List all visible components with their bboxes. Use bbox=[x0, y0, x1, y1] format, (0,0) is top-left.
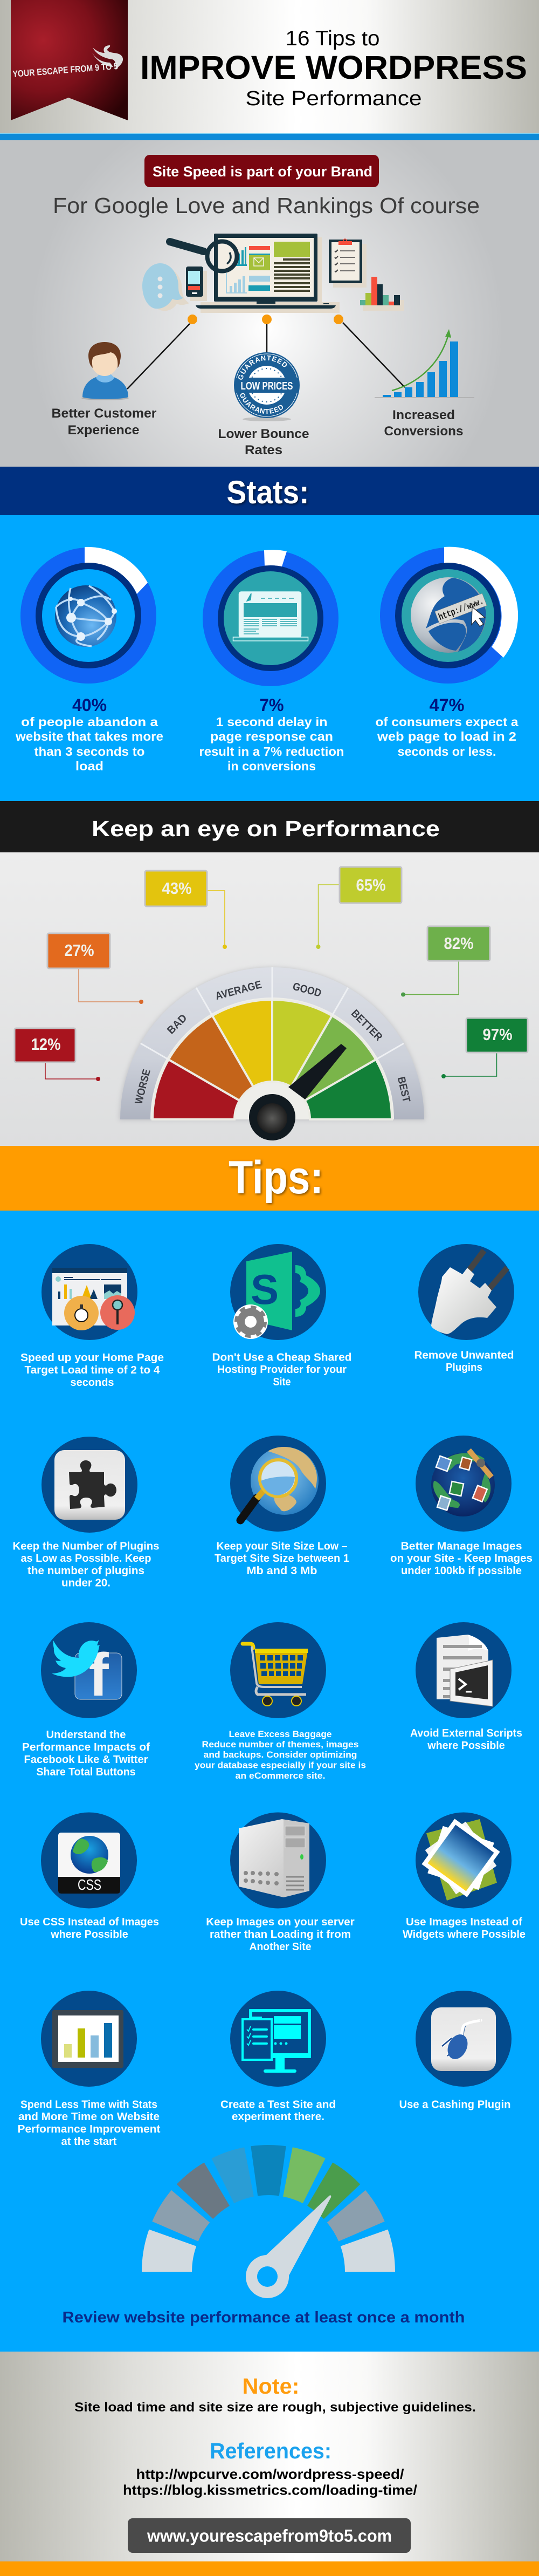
stat: 7% bbox=[199, 550, 344, 773]
icon: facebook: f bbox=[88, 1641, 109, 1709]
speedometer graphic bbox=[142, 2145, 395, 2298]
tip text: Share Total Buttons bbox=[37, 1766, 136, 1778]
tip text bbox=[20, 1352, 164, 1389]
icon: server bbox=[239, 1819, 309, 1897]
icon: analytics page bbox=[52, 1268, 135, 1330]
tip text: Facebook Like & Twitter bbox=[24, 1754, 148, 1766]
stat: 47% bbox=[375, 547, 519, 759]
stat text: in conversions bbox=[227, 759, 316, 773]
tip 8: excess baggage bbox=[195, 1622, 366, 1781]
tip 9: external scripts bbox=[410, 1622, 522, 1752]
stat text: of consumers expect a bbox=[375, 715, 519, 729]
tip text: Avoid External Scripts bbox=[410, 1727, 522, 1739]
icon: web globe bbox=[411, 577, 487, 653]
icon: script document bbox=[437, 1635, 493, 1706]
tip 5: site size bbox=[215, 1436, 349, 1577]
gauge labels: GOOD bbox=[292, 981, 322, 1000]
tip text: Remove Unwanted bbox=[414, 1350, 514, 1362]
tip text: your database especially if your site is bbox=[195, 1760, 366, 1771]
title bbox=[140, 27, 527, 110]
gauge labels: BAD bbox=[165, 1012, 189, 1036]
icon: guarantee seal: LOW PRICES bbox=[240, 380, 293, 392]
tip text: Use CSS Instead of Images bbox=[20, 1916, 159, 1928]
tip text bbox=[13, 1541, 160, 1589]
stat text: website that takes more bbox=[15, 729, 163, 743]
callout: 27%: 27% bbox=[65, 941, 94, 960]
stat text: than 3 seconds to bbox=[34, 744, 144, 759]
tip text: Performance Impacts of bbox=[22, 1741, 150, 1753]
gauge labels: BEST bbox=[395, 1076, 412, 1104]
website pill bbox=[128, 2518, 411, 2553]
brand pill: Site Speed is part of your Brand bbox=[153, 163, 372, 180]
heading bar: tips: Tips: bbox=[229, 1152, 323, 1204]
caption: better customer experience: Experience bbox=[68, 423, 139, 438]
tip 2: cheap shared hosting bbox=[212, 1244, 351, 1388]
tip text bbox=[206, 1916, 355, 1953]
gauge needle bbox=[249, 1044, 347, 1140]
gauge labels: AVERAGE bbox=[214, 979, 263, 1002]
icon: twitter bird bbox=[52, 1639, 100, 1677]
caption: lower bounce rates: Rates bbox=[245, 443, 282, 457]
tip text: Site bbox=[273, 1376, 291, 1388]
callout: 82%: 82% bbox=[444, 934, 473, 953]
review note: Review website performance at least once a month bbox=[63, 2309, 465, 2326]
stat text: web page to load in 2 bbox=[377, 729, 516, 743]
callout: 82% bbox=[401, 926, 490, 997]
tip text: Spend Less Time with Stats bbox=[20, 2099, 157, 2110]
tip text: at the start bbox=[61, 2136, 117, 2148]
tip 13: less time with stats bbox=[17, 1991, 161, 2148]
tip text: Performance Improvement bbox=[17, 2123, 161, 2135]
url bar: http://www. bbox=[437, 597, 485, 623]
tip text: Use Images Instead of bbox=[406, 1916, 522, 1928]
tip text: where Possible bbox=[427, 1740, 505, 1752]
connector lines bbox=[127, 315, 405, 389]
tip text: the number of plugins bbox=[27, 1565, 144, 1577]
stat text: page response can bbox=[210, 729, 333, 743]
icon: sharepoint: S bbox=[251, 1266, 279, 1313]
heading bar: keep an eye on performance bbox=[0, 801, 539, 852]
icon: shopping cart bbox=[243, 1644, 308, 1706]
panel: stats bbox=[0, 515, 539, 801]
stat text: 47% bbox=[429, 695, 465, 715]
brand pill bbox=[144, 155, 379, 187]
tip text: Mb and 3 Mb bbox=[247, 1565, 317, 1577]
tip 3: remove plugins bbox=[414, 1244, 514, 1374]
laptop shadow bbox=[201, 237, 340, 313]
caption: lower bounce rates: Lower Bounce bbox=[218, 427, 309, 441]
logo text: YOUR ESCAPE FROM 9 TO 5 bbox=[12, 61, 119, 79]
tip text bbox=[20, 1916, 159, 1940]
icon: facebook bbox=[75, 1641, 122, 1709]
panel: site speed brand bbox=[0, 140, 539, 467]
caption: increased conversions: Increased bbox=[392, 408, 455, 422]
heading bar: keep an eye on performance: Keep an eye on Performance bbox=[92, 816, 440, 841]
heading bar: stats: Stats: bbox=[226, 474, 309, 510]
tip text: Keep Images on your server bbox=[206, 1916, 355, 1928]
tip 4: number of plugins bbox=[13, 1437, 160, 1589]
icon: sharepoint bbox=[233, 1252, 320, 1339]
tip text: on your Site - Keep Images bbox=[390, 1553, 533, 1564]
icon: earth with photos bbox=[431, 1450, 495, 1516]
callout: 12% bbox=[15, 1028, 100, 1081]
tip 6: manage images bbox=[390, 1436, 533, 1577]
note heading: Note: bbox=[243, 2374, 300, 2399]
tip text: Leave Excess Baggage bbox=[229, 1729, 332, 1739]
stat: 40% bbox=[15, 547, 163, 773]
bottom orange bar bbox=[0, 2561, 539, 2576]
title: IMPROVE WORDPRESS bbox=[140, 49, 527, 86]
tip text bbox=[215, 1541, 349, 1577]
callout: 65%: 65% bbox=[356, 876, 386, 894]
stat text: 1 second delay in bbox=[216, 715, 328, 729]
laptop bbox=[196, 234, 336, 309]
tip text: Keep your Site Size Low – bbox=[217, 1541, 347, 1553]
icon: css file bbox=[58, 1833, 120, 1894]
stat text: result in a 7% reduction bbox=[199, 744, 344, 759]
magnifier bbox=[170, 242, 237, 271]
gauge segments bbox=[153, 1000, 392, 1119]
tip text: Hosting Provider for your bbox=[217, 1364, 347, 1376]
note text: Site load time and site size are rough, subjective guidelines. bbox=[74, 2400, 476, 2415]
tip 7: facebook and twitter bbox=[22, 1622, 150, 1778]
caption: better customer experience: Better Customer bbox=[52, 406, 156, 421]
tip text: rather than Loading it from bbox=[210, 1929, 351, 1940]
stat text: 40% bbox=[72, 695, 107, 715]
website pill: www.yourescapefrom9to5.com bbox=[147, 2526, 392, 2545]
tip text: under 100kb if possible bbox=[401, 1565, 522, 1577]
tip text bbox=[212, 1352, 351, 1388]
tip text: Another Site bbox=[249, 1941, 312, 1953]
stat text: of people abandon a bbox=[21, 715, 158, 729]
title: 16 Tips to bbox=[286, 27, 379, 50]
heading bar: tips bbox=[0, 1146, 539, 1211]
tip text: Reduce number of themes, images bbox=[202, 1739, 359, 1750]
phone bbox=[186, 267, 207, 301]
tip text: under 20. bbox=[61, 1577, 110, 1589]
tip text bbox=[410, 1727, 522, 1752]
tip text: Target Site Size between 1 bbox=[215, 1553, 349, 1564]
caption: better customer experience bbox=[52, 406, 156, 438]
tip text bbox=[17, 2099, 161, 2148]
tip text: Create a Test Site and bbox=[220, 2099, 336, 2110]
tip text: Target Load time of 2 to 4 bbox=[25, 1364, 160, 1376]
title: Site Performance bbox=[246, 87, 421, 110]
icon: puzzle tile bbox=[54, 1450, 125, 1520]
tip text: Widgets where Possible bbox=[403, 1929, 526, 1940]
tip text: Use a Cashing Plugin bbox=[399, 2099, 511, 2110]
tip text: Don't Use a Cheap Shared bbox=[212, 1352, 351, 1364]
icon: rising conversions chart bbox=[375, 329, 474, 398]
callout: 43%: 43% bbox=[162, 879, 192, 898]
tip text: Plugins bbox=[446, 1362, 482, 1374]
tip text: Better Manage Images bbox=[401, 1541, 522, 1553]
caption: lower bounce rates bbox=[218, 427, 309, 457]
illustration: laptop with analytics bbox=[142, 234, 404, 313]
tip text: an eCommerce site. bbox=[235, 1771, 326, 1781]
tip text bbox=[195, 1729, 366, 1781]
caption: increased conversions: Conversions bbox=[384, 424, 464, 439]
panel: footer notes bbox=[0, 2352, 539, 2561]
tip 14: test site bbox=[220, 1991, 336, 2123]
tip text: where Possible bbox=[50, 1929, 128, 1940]
stat text bbox=[15, 695, 163, 773]
clipboard bbox=[330, 239, 367, 288]
tip text: Speed up your Home Page bbox=[20, 1352, 164, 1364]
header panel bbox=[0, 0, 539, 133]
tip text: Keep the Number of Plugins bbox=[13, 1541, 160, 1553]
callout: 97% bbox=[441, 1018, 528, 1078]
reference links bbox=[123, 2466, 417, 2498]
tip 15: caching plugin bbox=[399, 1991, 512, 2110]
panel: performance gauge bbox=[0, 852, 539, 1146]
subheading: For Google Love and Rankings Of course bbox=[53, 193, 480, 218]
logo ribbon bbox=[11, 0, 128, 120]
stat text: seconds or less. bbox=[398, 744, 496, 759]
references heading: References: bbox=[210, 2438, 331, 2463]
tip 11: images on server bbox=[206, 1813, 355, 1953]
reference links: https://blog.kissmetrics.com/loading-time/ bbox=[123, 2482, 417, 2498]
gauge labels bbox=[133, 979, 412, 1105]
heading bar: stats bbox=[0, 467, 539, 515]
callout: 97%: 97% bbox=[483, 1025, 512, 1044]
icon: globe and magnifier bbox=[240, 1447, 319, 1520]
icon: guarantee seal bbox=[234, 352, 300, 421]
gauge labels: BETTER bbox=[349, 1008, 385, 1043]
tip text: Understand the bbox=[46, 1729, 126, 1741]
tip text: and backups. Consider optimizing bbox=[204, 1750, 357, 1760]
gauge bbox=[119, 967, 425, 1140]
icon: network globe bbox=[55, 585, 117, 647]
tip 10: css instead of images bbox=[20, 1813, 159, 1940]
stat text bbox=[375, 695, 519, 759]
mini bar chart bbox=[360, 277, 404, 311]
callout: 27% bbox=[47, 933, 143, 1004]
icon: laptop page bbox=[233, 592, 308, 641]
icon: plug bbox=[431, 1251, 507, 1334]
icon: css file: CSS bbox=[78, 1876, 101, 1893]
icon: guarantee seal: GUARANTEED bbox=[238, 355, 287, 380]
tip text: seconds bbox=[70, 1377, 114, 1389]
callout: 43% bbox=[145, 871, 227, 949]
tip text: experiment there. bbox=[232, 2111, 324, 2123]
callout: 65% bbox=[316, 867, 402, 949]
stat text bbox=[199, 695, 344, 773]
gauge labels: WORSE bbox=[133, 1068, 153, 1105]
tip text bbox=[220, 2099, 336, 2123]
tip text bbox=[390, 1541, 533, 1577]
icon: customer bbox=[81, 342, 129, 400]
logo wings bbox=[92, 45, 123, 69]
speech bubble bbox=[142, 263, 189, 311]
icon: bar chart board bbox=[52, 2010, 123, 2068]
tip text bbox=[22, 1729, 150, 1778]
caption: increased conversions bbox=[384, 408, 464, 439]
tip text: and More Time on Website bbox=[18, 2111, 160, 2123]
tip text bbox=[414, 1350, 514, 1374]
tip 12: images instead of widgets bbox=[403, 1813, 526, 1940]
callout: 12%: 12% bbox=[31, 1035, 60, 1054]
reference links: http://wpcurve.com/wordpress-speed/ bbox=[136, 2466, 404, 2482]
icon: guarantee seal: GUARANTEED bbox=[240, 393, 283, 414]
panel: tips bbox=[0, 1211, 539, 2352]
icon: plug tile bbox=[431, 2007, 496, 2071]
tip text bbox=[403, 1916, 526, 1940]
tip text: as Low as Possible. Keep bbox=[20, 1553, 151, 1564]
stat text: load bbox=[75, 759, 103, 773]
speedometer needle bbox=[246, 2195, 331, 2298]
stat text: 7% bbox=[260, 695, 284, 715]
icon: photo stack bbox=[421, 1819, 500, 1901]
icon: monitor and checklist bbox=[243, 2011, 311, 2073]
tip 1: speed up home page bbox=[20, 1244, 164, 1389]
blue divider bar bbox=[0, 133, 539, 140]
